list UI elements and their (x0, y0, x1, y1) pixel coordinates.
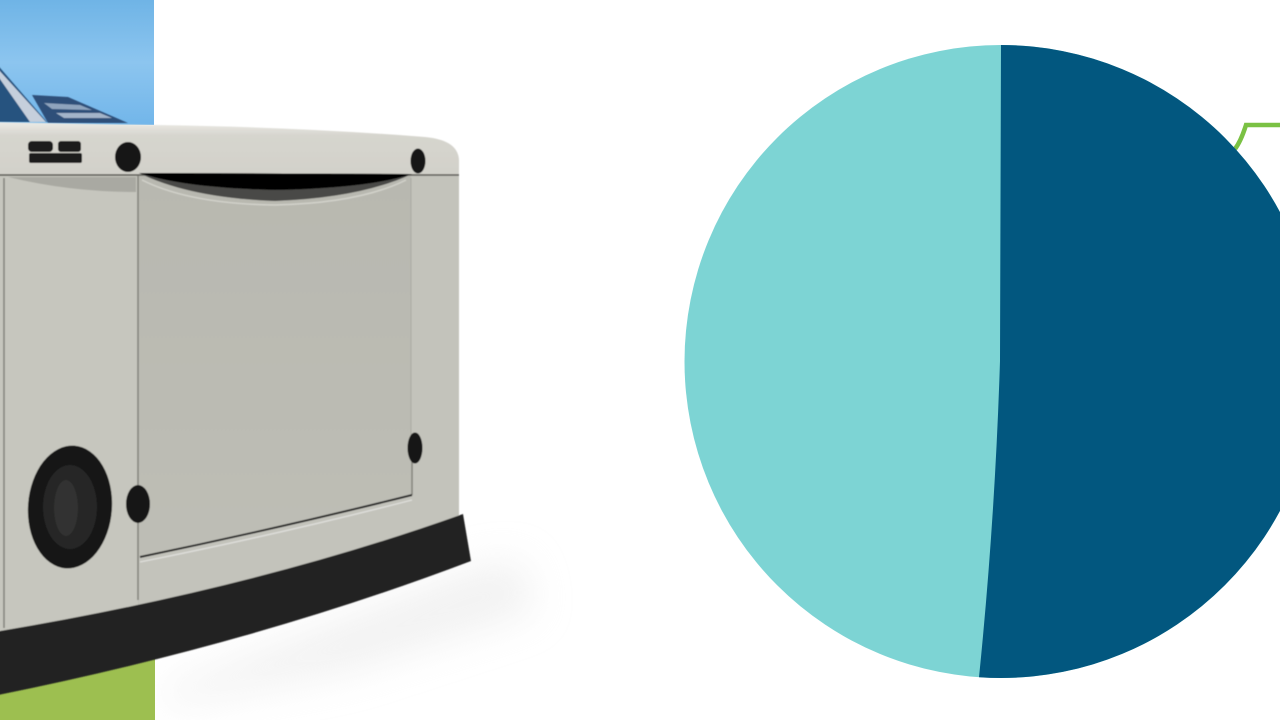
generator body (0, 172, 459, 652)
ground shadow (160, 560, 535, 705)
shadow under lid on left panel (8, 177, 136, 192)
slice: dark blue (979, 45, 1280, 678)
grass (0, 655, 155, 720)
fasteners (115, 142, 426, 523)
lid (0, 122, 459, 176)
panel: generator (0, 122, 471, 697)
door right edge (410, 178, 412, 450)
lid handle recess (139, 173, 412, 201)
left side panel (0, 176, 138, 652)
sky background (0, 0, 154, 125)
door bottom edge (140, 495, 412, 557)
black base (0, 514, 471, 697)
pie chart (684, 45, 1280, 678)
round vent (24, 443, 116, 571)
panel: house photo strip (0, 0, 155, 720)
house roof (0, 54, 128, 123)
panel seams (4, 176, 412, 628)
slice: light teal (684, 45, 1280, 678)
right trim and lower door strip (139, 176, 459, 620)
leader line: green (1235, 125, 1280, 149)
logo (28, 141, 82, 163)
